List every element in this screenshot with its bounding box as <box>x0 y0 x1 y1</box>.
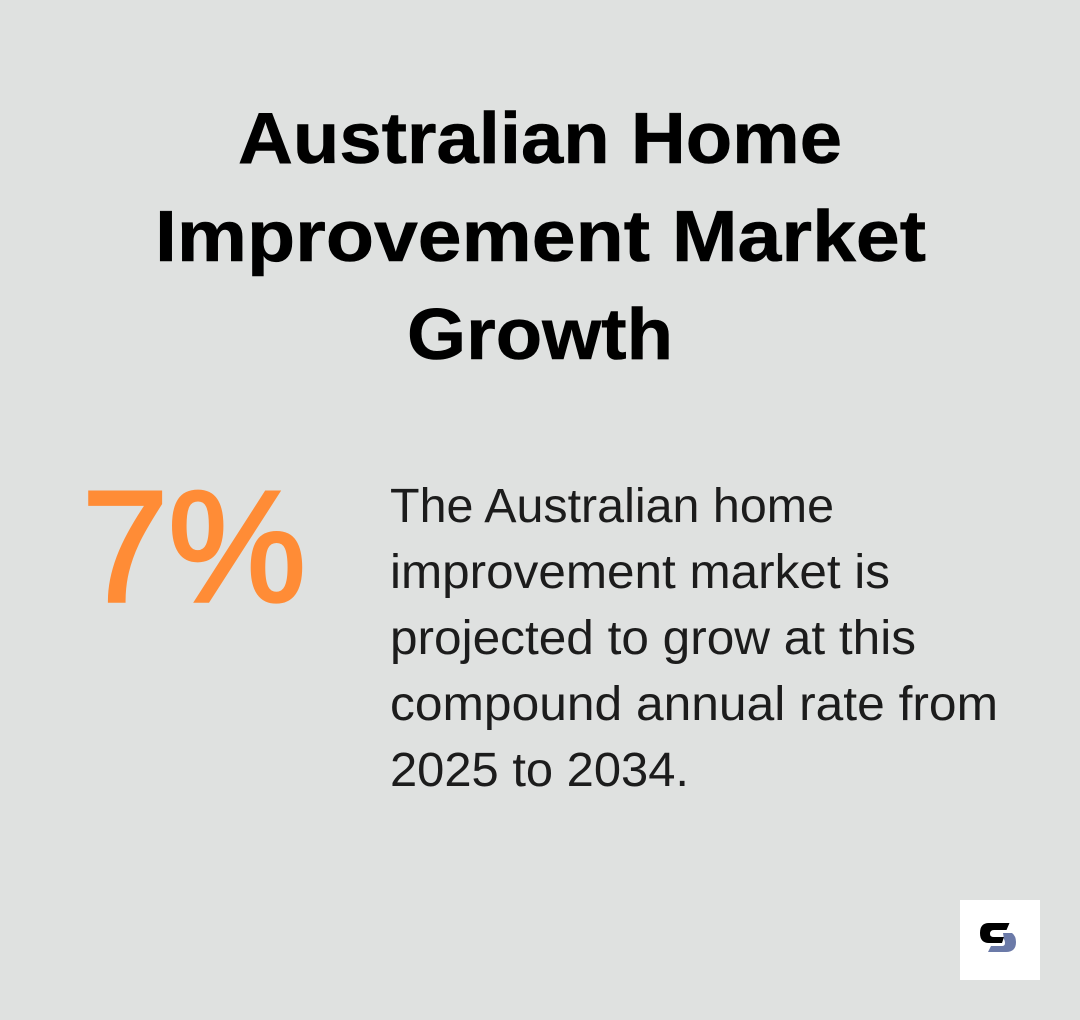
description text: projected to grow at this <box>390 612 916 665</box>
title <box>155 99 926 375</box>
description text: improvement market is <box>390 546 890 599</box>
logo badge <box>960 900 1040 980</box>
statistic: 7%: 7% <box>82 459 306 635</box>
description text: 2025 to 2034. <box>390 744 689 797</box>
icon: logo mark blue part <box>988 933 1016 952</box>
title: Improvement Market <box>155 197 926 277</box>
description text: compound annual rate from <box>390 678 998 731</box>
title: Australian Home <box>238 99 842 179</box>
description text <box>390 480 998 797</box>
description text: The Australian home <box>390 480 834 533</box>
title: Growth <box>407 295 673 375</box>
icon: logo mark black part <box>980 923 1010 943</box>
